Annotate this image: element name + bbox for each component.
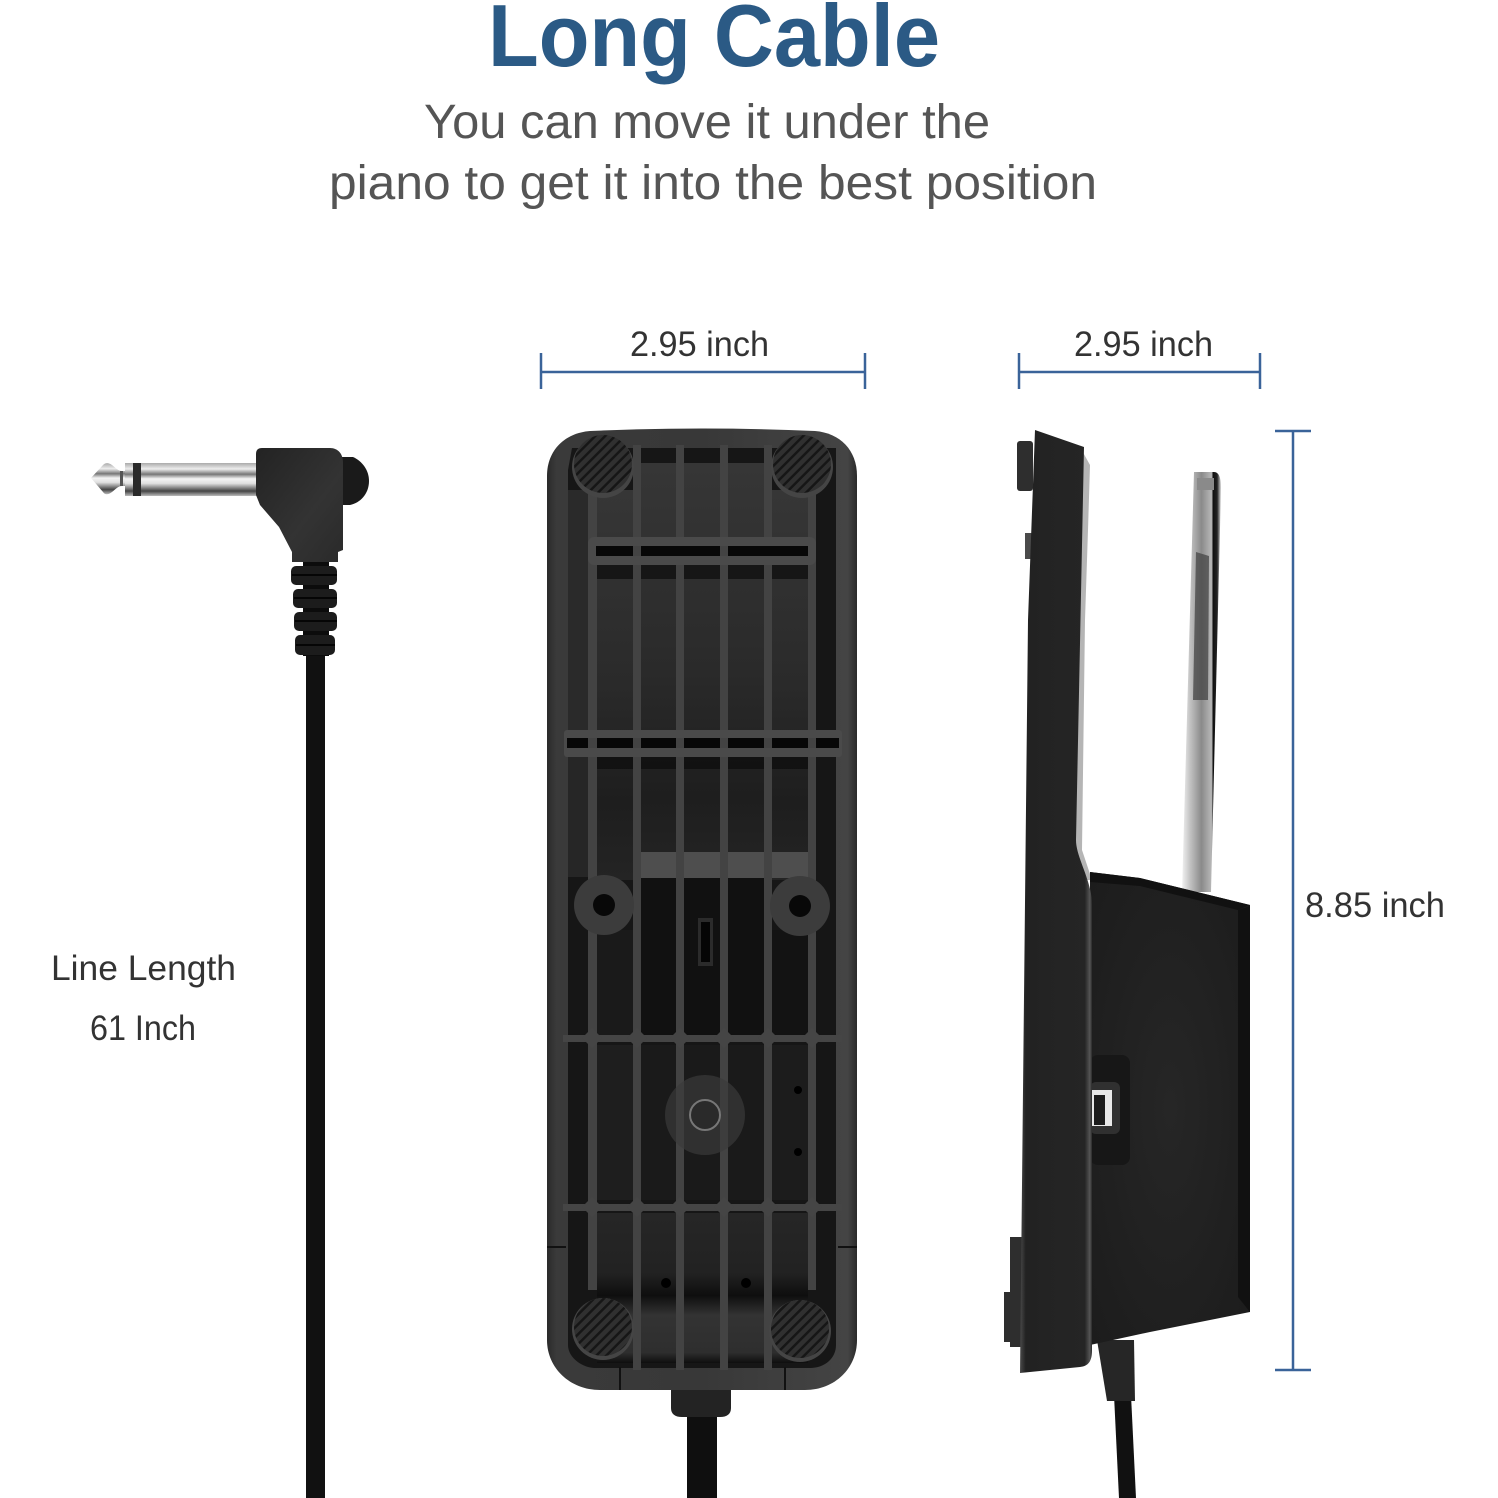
upper crossbar: [588, 537, 816, 565]
width dimension: bottom view: 2.95 inch: [630, 325, 769, 364]
height dimension: 8.85 inch: [1305, 886, 1445, 925]
right-angle housing: [335, 457, 369, 505]
subtitle: [329, 96, 1097, 210]
inner well: [568, 448, 836, 1368]
lower cells: [597, 878, 808, 1200]
width dimension: bottom view: [541, 325, 865, 389]
height dimension: [1275, 431, 1445, 1370]
cable: [1114, 1395, 1136, 1498]
pedal body: [547, 428, 857, 1390]
light band: [640, 852, 808, 878]
bottom cells: [597, 1213, 808, 1363]
subtitle: You can move it under the: [424, 96, 990, 149]
subtitle: piano to get it into the best position: [329, 157, 1097, 210]
pedal feet and tabs: [1004, 441, 1033, 1347]
foot plate: [1020, 430, 1092, 1373]
cable length label: 61 Inch: [90, 1009, 196, 1048]
metal lever: [1182, 472, 1221, 892]
pedal underside view: [547, 428, 857, 1498]
base housing: [1090, 872, 1250, 1345]
strain relief: [291, 560, 337, 656]
vertical ribs: [588, 445, 816, 1370]
metal strip behind plate: [1070, 447, 1092, 880]
cable: [687, 1410, 717, 1498]
shadows under crossbars: [588, 565, 808, 769]
left channel: [568, 490, 588, 730]
rubber feet: [572, 435, 833, 1362]
cable collar: [671, 1385, 731, 1417]
center disc and holes: [661, 918, 802, 1288]
lower crossbar: [564, 730, 842, 757]
pedal side view: [1004, 430, 1250, 1498]
cable boot: [1097, 1340, 1135, 1401]
cable length label: Line Length: [51, 949, 236, 988]
upper cells: [597, 463, 808, 880]
jack plug and long cable: [91, 448, 369, 1498]
switch panel: [1090, 1055, 1130, 1165]
rim seams: [547, 1247, 857, 1390]
width dimension: side view: [1019, 325, 1260, 389]
screw bosses: [574, 875, 830, 936]
thin cross ribs: [563, 1028, 842, 1217]
cable: [306, 650, 325, 1498]
width dimension: side view: 2.95 inch: [1074, 325, 1213, 364]
cable length label: [51, 949, 236, 1048]
metal plug: [91, 463, 259, 496]
